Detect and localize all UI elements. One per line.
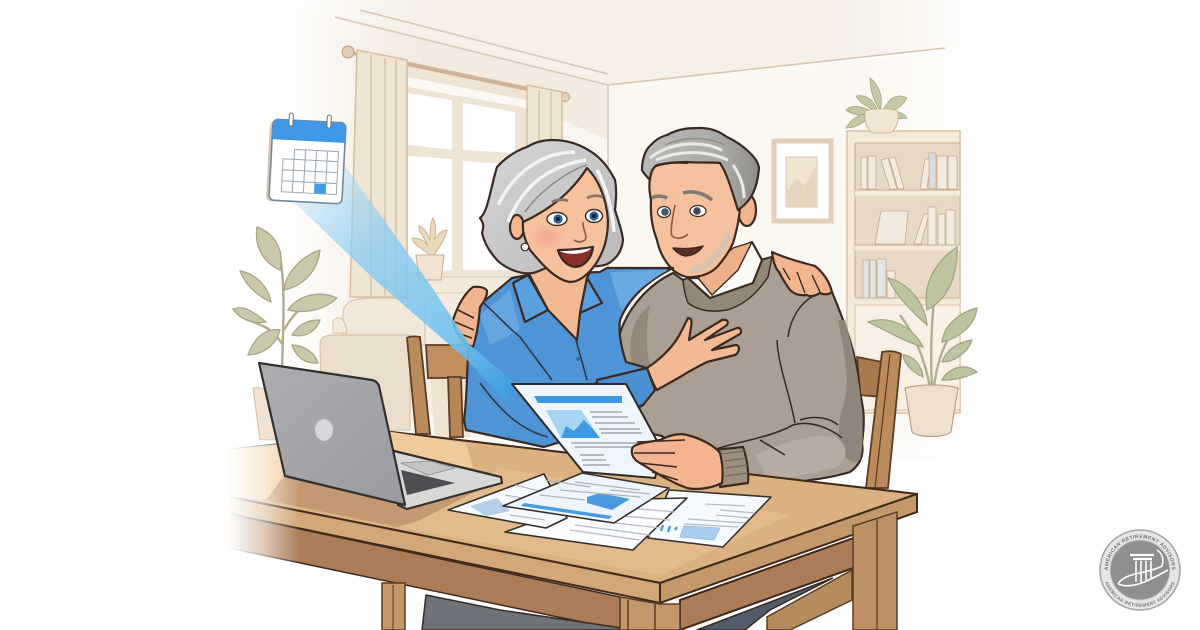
ceiling (326, 0, 936, 84)
right table edge (660, 494, 917, 603)
left curtain (350, 50, 407, 297)
trousers (422, 595, 622, 630)
document bottom (505, 498, 687, 550)
man sweater collar (683, 257, 772, 311)
left chair (407, 336, 472, 437)
lit area (215, 432, 473, 500)
woman shirt (464, 268, 673, 447)
document right (648, 490, 771, 547)
icon: calendar (266, 112, 346, 205)
window sill (405, 277, 535, 293)
earring (521, 243, 529, 251)
sweater cuff (713, 447, 748, 487)
woman face (523, 168, 608, 282)
sweater folds (777, 293, 820, 423)
table (215, 432, 917, 630)
man nose (671, 205, 688, 238)
shirt collars (513, 275, 602, 322)
badge ring (1100, 530, 1180, 610)
right curtain (527, 85, 562, 210)
man sweater (612, 257, 864, 488)
blue beam from calendar (295, 163, 516, 400)
man ear (738, 194, 756, 226)
man hair (642, 128, 759, 210)
laptop shadow (266, 476, 502, 527)
table top (215, 432, 917, 583)
shirt cuff (597, 368, 655, 420)
right chair lower (767, 570, 852, 630)
plant pot (905, 385, 958, 436)
picture frame (774, 141, 831, 221)
hand on her shoulder (772, 252, 832, 296)
apron (215, 511, 620, 630)
man neck (698, 242, 752, 295)
shirt placard (576, 340, 587, 380)
chair slat background (430, 378, 470, 437)
chair post (407, 336, 430, 434)
icon: shelf-top plant (846, 78, 907, 133)
floor (200, 415, 1000, 460)
icon: left floor plant (233, 227, 337, 380)
man stubble (690, 226, 731, 274)
document text lines (571, 412, 645, 465)
badge text: AMERICAN RETIREMENT ADVISORS (1104, 534, 1176, 570)
woman nose (574, 222, 586, 242)
sun ray on wall (563, 120, 607, 271)
back leg (382, 583, 405, 630)
blush (535, 228, 559, 246)
sweater shading (838, 320, 863, 462)
bookshelf (847, 131, 960, 413)
chair rail (426, 345, 472, 378)
man hair highlights (650, 144, 744, 198)
documents on table (448, 473, 771, 550)
hand (632, 434, 723, 489)
front leg (620, 597, 680, 630)
icon: window sill plant (412, 218, 447, 280)
shirt shading (610, 270, 668, 312)
man shirt collar (688, 242, 762, 298)
curtain rod (342, 46, 570, 102)
room objects (253, 10, 960, 440)
fade over table left edge (210, 440, 300, 570)
front table edge (215, 494, 660, 603)
trackpad (401, 461, 455, 475)
man mouth (673, 246, 703, 256)
held document (512, 384, 662, 478)
document banner (534, 396, 622, 403)
document left (448, 474, 567, 528)
woman eyes (547, 210, 602, 226)
man (612, 128, 864, 488)
logo badge: AMERICAN RETIREMENT ADVISORS (1105, 582, 1174, 607)
room background (319, 0, 936, 450)
man face (649, 160, 740, 277)
woman brows (552, 196, 603, 202)
logo badge (1099, 529, 1181, 611)
laptop lid (259, 363, 405, 505)
woman mouth (558, 247, 593, 267)
woman ear (510, 215, 524, 239)
ceiling lines (335, 10, 945, 300)
shirt folds (480, 300, 647, 437)
laptop (259, 363, 502, 509)
hair highlights (498, 152, 614, 232)
man holding hand (632, 434, 748, 489)
man eyes (658, 206, 706, 218)
hand on chest (647, 318, 741, 390)
keyboard (401, 470, 455, 495)
man hand on her back (453, 287, 487, 347)
document center (503, 473, 669, 523)
woman neck and chest (528, 262, 595, 340)
laptop logo (315, 419, 333, 441)
right leg (853, 512, 897, 630)
hair (480, 140, 623, 273)
badge column icon (1118, 550, 1168, 586)
illustration: couple reviewing retirement documents (231, 0, 1181, 630)
chair slat (448, 377, 463, 437)
document chart (546, 410, 600, 438)
man brows (652, 192, 712, 200)
right chair (857, 351, 901, 488)
right wall (609, 54, 908, 328)
sofa (320, 298, 425, 430)
laptop base (390, 450, 502, 509)
left wall (100, 0, 608, 460)
icon: right floor plant (868, 247, 977, 436)
window (405, 63, 535, 293)
woman (453, 140, 741, 447)
icon: left floor plant pot (253, 388, 290, 440)
